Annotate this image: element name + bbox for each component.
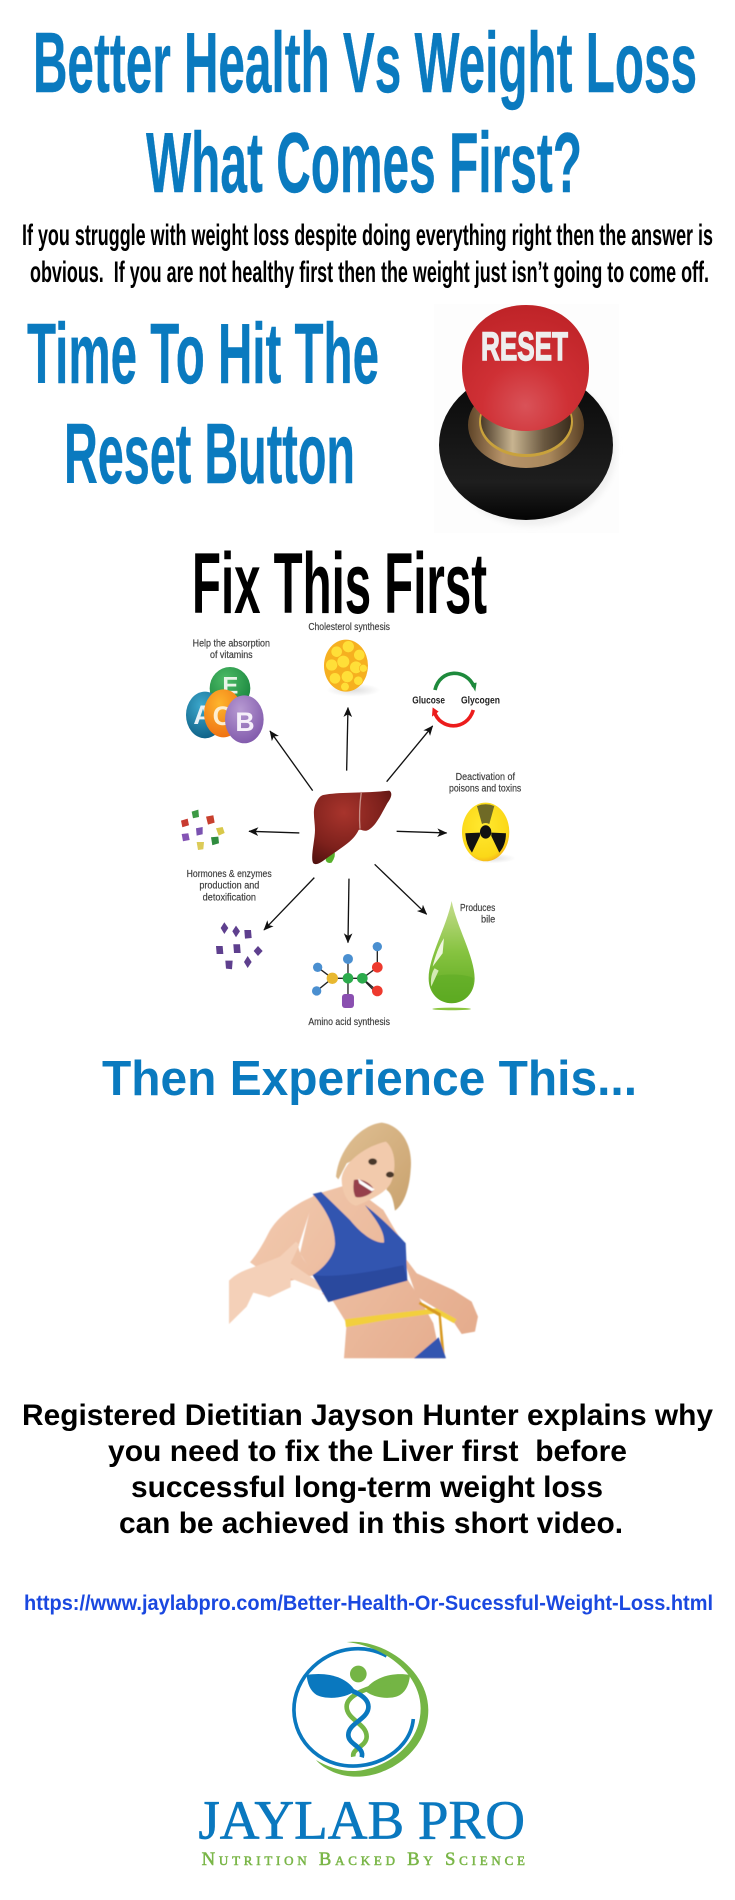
heading: fix this first: Fix This First (192, 536, 487, 632)
logo: Jaylab Pro (198, 1642, 525, 1870)
logo caduceus (307, 1666, 410, 1757)
icon: vitamin spheres: C (213, 701, 232, 731)
icon: vitamin spheres: A (193, 700, 213, 730)
label: deactivation: Deactivation of (456, 772, 515, 783)
label: hormones and enzymes: production and (199, 881, 259, 892)
icon: glucose glycogen cycle (412, 673, 500, 726)
icon: bile drop (429, 901, 475, 1010)
hair (336, 1123, 411, 1211)
label: amino acid: Amino acid synthesis (308, 1017, 390, 1028)
icon: vitamin spheres (186, 667, 264, 743)
open mouth (353, 1179, 375, 1197)
upper arm (250, 1196, 315, 1283)
arrows from the liver (249, 708, 447, 943)
logo ring (294, 1642, 428, 1777)
label: deactivation: poisons and toxins (449, 784, 521, 795)
icon: amino acid molecule (312, 942, 383, 1008)
liver function diagram (181, 622, 521, 1028)
text block: dietitian explanation: you need to fix the Liver first before (108, 1435, 627, 1468)
icon: red reset button (434, 304, 619, 533)
intro text block (22, 219, 713, 289)
photo: woman measuring waist (229, 1123, 478, 1358)
logo wordmark: JAYLAB PRO (198, 1789, 525, 1850)
label: hormones and enzymes: Hormones & enzymes (187, 869, 272, 880)
label: hormones and enzymes: detoxification (203, 892, 256, 903)
label: bile (460, 903, 496, 925)
text block: dietitian explanation: Registered Dietitian Jayson Hunter explains why (22, 1399, 713, 1432)
link url: https://www.jaylabpro.com/Better-Health-Or-Sucessful-Weight-Loss.html (24, 1592, 713, 1615)
icon: liver (312, 791, 391, 864)
label: cholesterol: Cholesterol synthesis (308, 622, 390, 633)
eyes (368, 1158, 394, 1178)
icon: vitamin spheres: E (222, 672, 238, 699)
icon: radiation symbol (462, 803, 516, 863)
icon: purple crystals (216, 922, 263, 969)
icon: red reset button: RESET (481, 325, 568, 369)
label: bile: bile (481, 914, 496, 925)
sports bra (313, 1192, 407, 1302)
heading: reset button (27, 307, 379, 502)
tape measure (345, 1302, 457, 1358)
right arm and hand (402, 1253, 478, 1334)
text block: dietitian explanation: successful long-term weight loss (131, 1471, 603, 1504)
chest, neck and shoulders (300, 1186, 406, 1277)
label: vitamins (193, 639, 270, 661)
label: deactivation (449, 772, 521, 795)
title (33, 16, 697, 211)
face (342, 1142, 394, 1206)
icon: glucose glycogen cycle: Glucose (412, 696, 446, 707)
logo tagline: Nutrition Backed By Science (202, 1849, 525, 1870)
torso (322, 1278, 441, 1358)
icon: hormone crystals (181, 810, 225, 850)
text block: dietitian explanation: can be achieved in this short video. (119, 1507, 623, 1540)
label: vitamins: Help the absorption (193, 639, 270, 650)
icon: glucose glycogen cycle: Glycogen (461, 696, 500, 707)
text block: dietitian explanation (22, 1399, 713, 1540)
label: bile: Produces (460, 903, 495, 914)
icon: vitamin spheres: B (235, 707, 255, 737)
label: vitamins: of vitamins (210, 650, 253, 661)
label: hormones and enzymes (187, 869, 272, 903)
heading: reset button: Time To Hit The (27, 307, 379, 402)
heading: then experience this: Then Experience This... (102, 1052, 637, 1106)
pointing hand (229, 1242, 322, 1324)
icon: cholesterol cluster (324, 640, 380, 697)
bottoms (414, 1337, 446, 1358)
heading: reset button: Reset Button (64, 407, 355, 502)
